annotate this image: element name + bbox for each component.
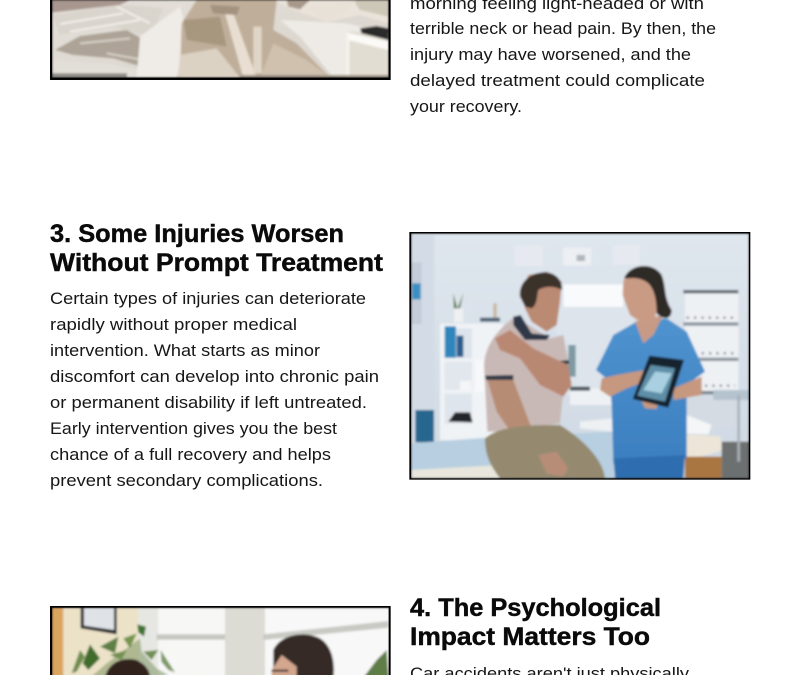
- photo: couple by a window with plant: [50, 606, 391, 675]
- text block: delayed symptoms, continued: delayed treatment could complicate: [410, 71, 705, 90]
- heading: section 4: 4. The Psychological: [410, 594, 661, 622]
- text block: delayed symptoms, continued: injury may have worsened, and the: [410, 45, 691, 64]
- photo: person sitting on bed in a robe: [50, 0, 391, 80]
- text block: section 3 body: discomfort can develop into chronic pain: [50, 367, 379, 386]
- text block: delayed symptoms, continued: terrible neck or head pain. By then, the: [410, 19, 716, 38]
- heading: section 4: Impact Matters Too: [410, 623, 650, 651]
- text block: delayed symptoms, continued: your recovery.: [410, 97, 522, 116]
- text block: delayed symptoms, continued: [410, 0, 716, 116]
- photo: nurse showing x-ray tablet to patient holding shoulder: [409, 232, 750, 480]
- text block: section 3 body: chance of a full recovery and helps: [50, 445, 331, 464]
- heading: section 4: [410, 594, 661, 651]
- heading: section 3: Without Prompt Treatment: [50, 249, 384, 277]
- text block: section 3 body: or permanent disability if left untreated.: [50, 393, 367, 412]
- heading: section 3: [50, 220, 384, 277]
- text block: section 3 body: Certain types of injuries can deteriorate: [50, 289, 366, 308]
- text block: section 3 body: [50, 289, 379, 490]
- heading: section 3: 3. Some Injuries Worsen: [50, 220, 344, 248]
- text block: section 3 body: intervention. What starts as minor: [50, 341, 320, 360]
- text block: section 3 body: rapidly without proper medical: [50, 315, 297, 334]
- text block: section 3 body: prevent secondary complications.: [50, 471, 323, 490]
- text block: section 3 body: Early intervention gives you the best: [50, 419, 337, 438]
